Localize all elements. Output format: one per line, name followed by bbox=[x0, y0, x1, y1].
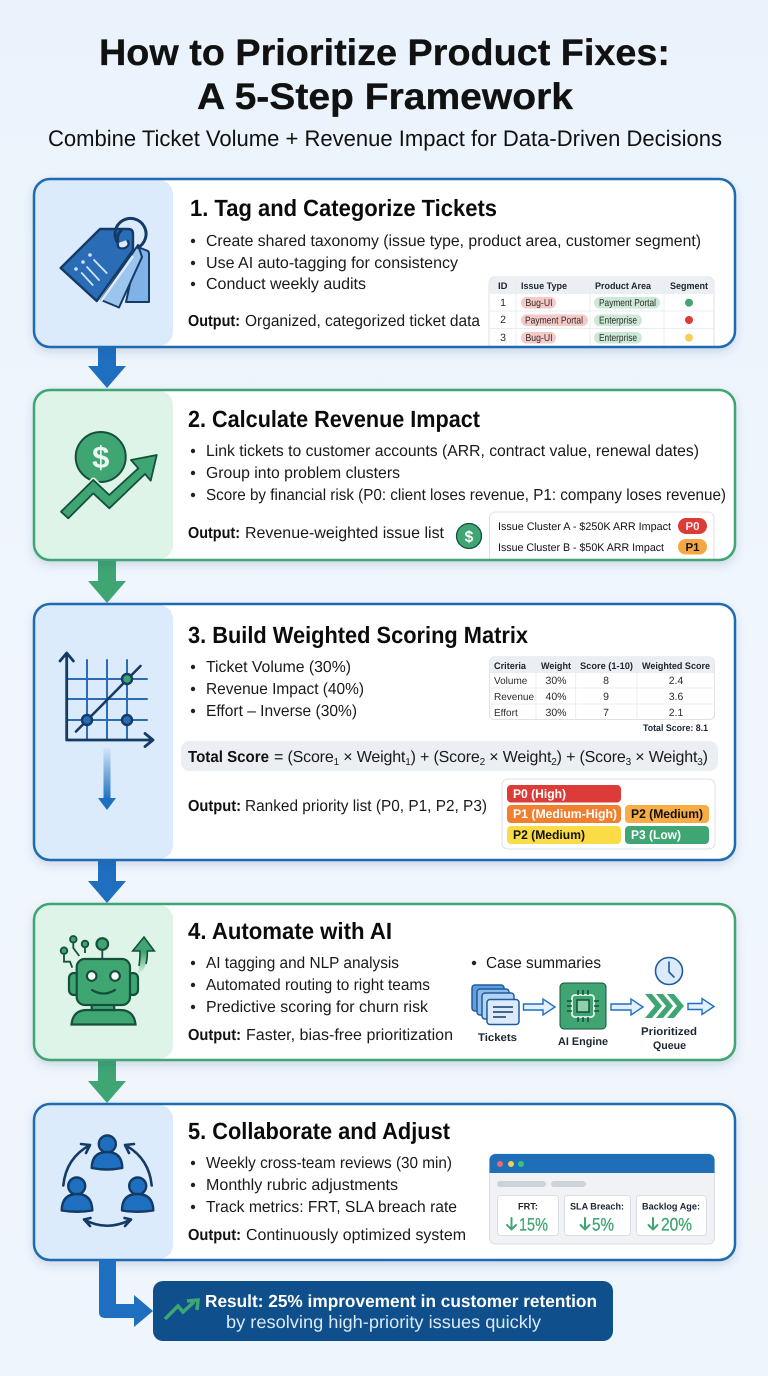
bullet list: Revenue Impact (40%) bbox=[206, 681, 364, 698]
issue cluster card: Issue Cluster B - $50K ARR Impact bbox=[498, 542, 664, 554]
title bbox=[99, 32, 670, 117]
issue cluster card: P1 bbox=[685, 542, 700, 554]
formula bar: 3 bbox=[626, 757, 632, 768]
table: weighted score: Weighted Score bbox=[642, 661, 710, 672]
table: ticket tags: Payment Portal bbox=[599, 298, 656, 309]
table: weighted score: 3.6 bbox=[669, 691, 683, 703]
arrow: step 4 to step 5 bbox=[88, 1059, 126, 1103]
panel: step 4 automate with AI bbox=[34, 904, 735, 1060]
panel: step 5 collaborate and adjust bbox=[34, 1104, 735, 1260]
table: weighted score: 2.4 bbox=[669, 675, 683, 687]
table: ticket tags: Payment Portal bbox=[525, 316, 583, 326]
bullet list: Track metrics: FRT, SLA breach rate bbox=[206, 1199, 457, 1216]
output line: Output: bbox=[188, 1227, 241, 1244]
priority grid bbox=[502, 779, 715, 849]
bullet list bbox=[191, 659, 364, 720]
table: weighted score: 40% bbox=[545, 691, 567, 703]
icon: queue chevrons bbox=[645, 994, 684, 1018]
metrics dashboard: 15% bbox=[519, 1214, 548, 1234]
priority grid: P2 (Medium) bbox=[513, 828, 585, 842]
table: ticket tags: Issue Type bbox=[521, 281, 567, 292]
flow labels: Queue bbox=[653, 1040, 686, 1052]
table: ticket tags: Bug-UI bbox=[526, 298, 552, 309]
icon: ticket stack bbox=[472, 985, 519, 1024]
formula bar: × Weight bbox=[631, 749, 698, 766]
formula bar: ) + (Score bbox=[557, 749, 626, 766]
output line: Continuously optimized system bbox=[246, 1227, 466, 1244]
flow labels bbox=[478, 1026, 697, 1052]
icon: clock bbox=[656, 958, 682, 984]
flow labels: Prioritized bbox=[641, 1026, 697, 1038]
bullet list: Create shared taxonomy (issue type, product area, customer segment) bbox=[206, 233, 701, 250]
table: weighted score: 8 bbox=[603, 675, 609, 687]
table: ticket tags: 1 bbox=[500, 297, 506, 309]
table: weighted score: Weight bbox=[541, 661, 572, 672]
formula bar: × Weight bbox=[485, 749, 552, 766]
formula bar: × Weight bbox=[339, 749, 406, 766]
formula bar: 2 bbox=[480, 757, 486, 768]
table: weighted score: 9 bbox=[603, 691, 609, 703]
table: weighted score: 7 bbox=[603, 707, 609, 719]
metrics dashboard: FRT: bbox=[518, 1202, 538, 1212]
bullet list: Ticket Volume (30%) bbox=[206, 659, 351, 676]
formula bar: ) + (Score bbox=[411, 749, 480, 766]
table: weighted score: Criteria bbox=[494, 661, 527, 672]
bullet list: Automated routing to right teams bbox=[206, 977, 430, 994]
table: ticket tags: Bug-UI bbox=[526, 333, 552, 344]
priority grid: P0 (High) bbox=[513, 787, 566, 801]
table: ticket tags: Enterprise bbox=[599, 316, 637, 326]
result text: by resolving high-priority issues quickly bbox=[226, 1312, 541, 1332]
bullet list: Monthly rubric adjustments bbox=[206, 1177, 398, 1194]
flow labels: Tickets bbox=[478, 1032, 517, 1044]
metrics dashboard bbox=[490, 1154, 714, 1244]
formula bar: 2 bbox=[551, 757, 557, 768]
metrics dashboard: SLA Breach: bbox=[570, 1202, 624, 1212]
output line: Output: bbox=[188, 1027, 241, 1044]
icon: AI chip bbox=[560, 983, 606, 1029]
heading: 1. Tag and Categorize Tickets bbox=[190, 195, 497, 221]
arrow: step 5 to result bbox=[99, 1260, 153, 1327]
icon: team cycle bbox=[62, 1136, 153, 1226]
heading: 2. Calculate Revenue Impact bbox=[188, 406, 480, 432]
result banner bbox=[153, 1281, 613, 1341]
output line: Ranked priority list (P0, P1, P2, P3) bbox=[245, 798, 487, 815]
bullet list: Weekly cross-team reviews (30 min) bbox=[206, 1155, 452, 1172]
bullet list: Link tickets to customer accounts (ARR, contract value, renewal dates) bbox=[206, 443, 699, 460]
icon: robot bbox=[61, 936, 154, 1024]
bullet list: Effort – Inverse (30%) bbox=[206, 703, 357, 720]
heading: 5. Collaborate and Adjust bbox=[188, 1118, 450, 1144]
table: weighted score: 2.1 bbox=[669, 707, 683, 719]
flow diagram: tickets to queue bbox=[472, 958, 714, 1052]
arrow: gradient down bbox=[98, 748, 116, 810]
table: weighted score: Total Score: 8.1 bbox=[643, 723, 709, 734]
flow labels: AI Engine bbox=[558, 1036, 608, 1048]
icon: small dollar coin: $ bbox=[465, 529, 474, 546]
table: ticket tags: 3 bbox=[500, 332, 506, 344]
table: weighted score: Volume bbox=[494, 676, 528, 687]
table: weighted score: Revenue bbox=[494, 692, 534, 703]
bullet: case summaries: Case summaries bbox=[486, 955, 601, 972]
formula bar: 1 bbox=[334, 757, 340, 768]
table: weighted score: Score (1-10) bbox=[580, 661, 633, 672]
metrics dashboard: Backlog Age: bbox=[642, 1202, 700, 1212]
table: ticket tags: Segment bbox=[670, 281, 709, 292]
issue cluster card: Issue Cluster A - $250K ARR Impact bbox=[498, 521, 671, 533]
heading: 3. Build Weighted Scoring Matrix bbox=[188, 622, 528, 648]
icon: trend up bbox=[165, 1300, 198, 1319]
formula bar bbox=[181, 741, 718, 771]
formula bar: = (Score bbox=[274, 749, 334, 766]
formula bar: 3 bbox=[697, 757, 703, 768]
formula bar: 1 bbox=[405, 757, 411, 768]
bullet list: Conduct weekly audits bbox=[206, 276, 366, 293]
output line: Output: bbox=[188, 525, 240, 542]
issue cluster card: P0 bbox=[685, 521, 700, 533]
output line: Organized, categorized ticket data bbox=[245, 313, 480, 330]
arrow: step 3 to step 4 bbox=[88, 859, 126, 903]
output line: Faster, bias-free prioritization bbox=[246, 1027, 453, 1044]
title: A 5-Step Framework bbox=[197, 76, 573, 117]
panel: step 3 weighted scoring bbox=[34, 604, 735, 860]
metrics dashboard: 20% bbox=[661, 1214, 692, 1234]
bullet list: Use AI auto-tagging for consistency bbox=[206, 255, 458, 272]
issue cluster card bbox=[490, 512, 714, 560]
arrow bbox=[688, 998, 714, 1014]
bullet list bbox=[191, 233, 701, 293]
table: ticket tags: ID bbox=[498, 281, 508, 292]
bullet list bbox=[191, 955, 430, 1016]
output line: Output: bbox=[188, 798, 241, 815]
arrow bbox=[611, 999, 643, 1015]
bullet list: AI tagging and NLP analysis bbox=[206, 955, 399, 972]
panel: step 2 revenue impact bbox=[34, 390, 735, 560]
table: weighted score: 30% bbox=[545, 707, 567, 719]
formula bar: ) bbox=[703, 749, 708, 766]
arrow bbox=[524, 999, 555, 1015]
table: weighted score bbox=[490, 657, 714, 734]
bullet list bbox=[191, 443, 726, 504]
table: ticket tags bbox=[489, 277, 714, 347]
result text: Result: 25% improvement in customer retention bbox=[205, 1291, 597, 1311]
output line: Output: bbox=[188, 313, 240, 330]
table: ticket tags: Product Area bbox=[595, 281, 652, 292]
bullet list: Predictive scoring for churn risk bbox=[206, 999, 429, 1016]
arrow: step 1 to step 2 bbox=[88, 346, 126, 388]
result text bbox=[205, 1291, 597, 1332]
output line: Revenue-weighted issue list bbox=[245, 525, 445, 542]
title: How to Prioritize Product Fixes: bbox=[99, 32, 670, 73]
icon: dollar and growth arrow bbox=[61, 432, 157, 518]
priority grid: P1 (Medium-High) bbox=[513, 807, 617, 821]
subtitle: Combine Ticket Volume + Revenue Impact for Data-Driven Decisions bbox=[48, 126, 722, 151]
arrow: step 2 to step 3 bbox=[88, 559, 126, 603]
bullet list bbox=[191, 1155, 457, 1216]
formula bar: Total Score bbox=[188, 749, 269, 766]
panel: step 1 tag and categorize bbox=[34, 179, 735, 347]
icon: small dollar coin bbox=[456, 524, 482, 548]
icon: price tags bbox=[61, 218, 149, 308]
bullet list: Score by financial risk (P0: client loses revenue, P1: company loses revenue) bbox=[206, 487, 726, 504]
icon: scoring matrix chart bbox=[60, 653, 153, 746]
icon: dollar and growth arrow: $ bbox=[92, 440, 109, 475]
table: weighted score: 30% bbox=[545, 675, 567, 687]
priority grid: P2 (Medium) bbox=[631, 807, 703, 821]
priority grid: P3 (Low) bbox=[631, 828, 681, 842]
heading: 4. Automate with AI bbox=[188, 918, 392, 944]
table: ticket tags: 2 bbox=[500, 314, 506, 326]
metrics dashboard: 5% bbox=[592, 1214, 614, 1234]
table: weighted score: Effort bbox=[494, 708, 518, 719]
bullet list: Group into problem clusters bbox=[206, 465, 400, 482]
table: ticket tags: Enterprise bbox=[599, 333, 637, 344]
